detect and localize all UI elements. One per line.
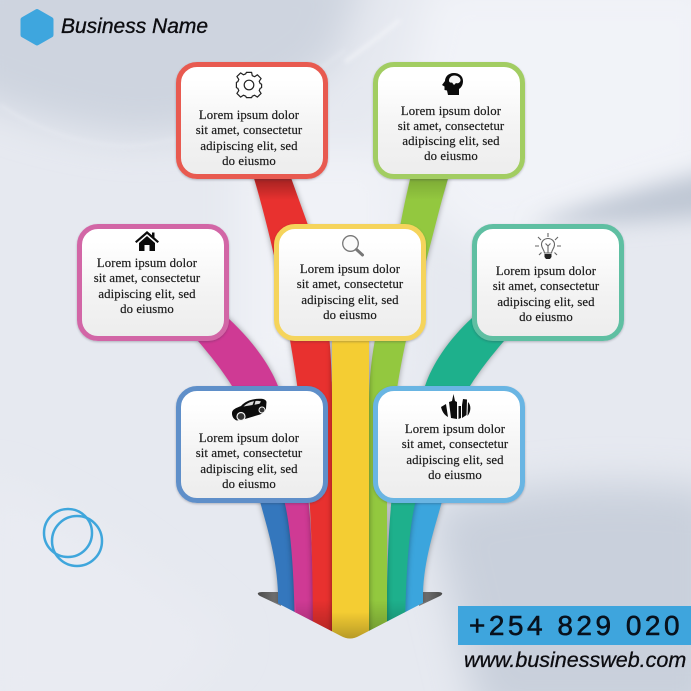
card: mind, green — [373, 62, 525, 179]
text block: do eiusmo — [519, 310, 573, 324]
text block: sit amet, consectetur — [297, 277, 403, 291]
card: home, pink — [77, 224, 229, 341]
arrow head wings — [258, 592, 442, 606]
text block: do eiusmo — [428, 468, 482, 482]
text block — [398, 104, 504, 163]
logo hexagon — [23, 12, 51, 43]
icon: city skyline globe — [441, 394, 470, 419]
text block: adipiscing elit, sed — [301, 293, 399, 307]
text block: adipiscing elit, sed — [402, 134, 500, 148]
text block: sit amet, consectetur — [402, 437, 508, 451]
text block: adipiscing elit, sed — [497, 295, 595, 309]
text block: sit amet, consectetur — [196, 123, 302, 137]
text block — [94, 256, 200, 316]
text block — [402, 422, 508, 482]
text block — [297, 262, 404, 322]
text block: adipiscing elit, sed — [406, 453, 504, 467]
text block — [493, 264, 600, 324]
text block: Lorem ipsum dolor — [199, 108, 299, 122]
icon: house — [135, 231, 159, 251]
text block: do eiusmo — [424, 149, 478, 163]
text block: adipiscing elit, sed — [98, 287, 196, 301]
text block: Lorem ipsum dolor — [300, 262, 400, 276]
colored ribbons — [198, 175, 504, 650]
text block — [196, 108, 302, 168]
text block: adipiscing elit, sed — [200, 139, 298, 153]
text block: do eiusmo — [222, 154, 276, 168]
website address: www.businessweb.com — [464, 648, 686, 672]
card: car, blue — [176, 386, 328, 503]
text block: sit amet, consectetur — [398, 119, 504, 133]
text block: sit amet, consectetur — [94, 271, 200, 285]
card: city, light blue — [373, 386, 525, 503]
icon: light bulb — [535, 233, 561, 259]
card: idea, teal — [472, 224, 624, 341]
icon: head with brain — [442, 73, 463, 95]
card: settings, red — [176, 62, 328, 179]
text block: adipiscing elit, sed — [200, 462, 298, 476]
card: search, yellow — [274, 224, 426, 341]
icon: magnifier — [342, 235, 364, 257]
text block: do eiusmo — [222, 477, 276, 491]
icon: car — [232, 398, 266, 421]
icon: gear — [236, 72, 262, 98]
text block: Lorem ipsum dolor — [199, 431, 299, 445]
text block: do eiusmo — [323, 308, 377, 322]
text block: Lorem ipsum dolor — [405, 422, 505, 436]
text block: sit amet, consectetur — [196, 446, 302, 460]
decorative overlapping circles — [44, 509, 102, 566]
text block: sit amet, consectetur — [493, 279, 599, 293]
text block: Lorem ipsum dolor — [97, 256, 197, 270]
text block: do eiusmo — [120, 302, 174, 316]
business name: Business Name — [61, 15, 208, 38]
text block: Lorem ipsum dolor — [496, 264, 596, 278]
text block — [196, 431, 302, 491]
text block: Lorem ipsum dolor — [401, 104, 501, 118]
phone number banner: +254 829 020 — [469, 610, 683, 641]
